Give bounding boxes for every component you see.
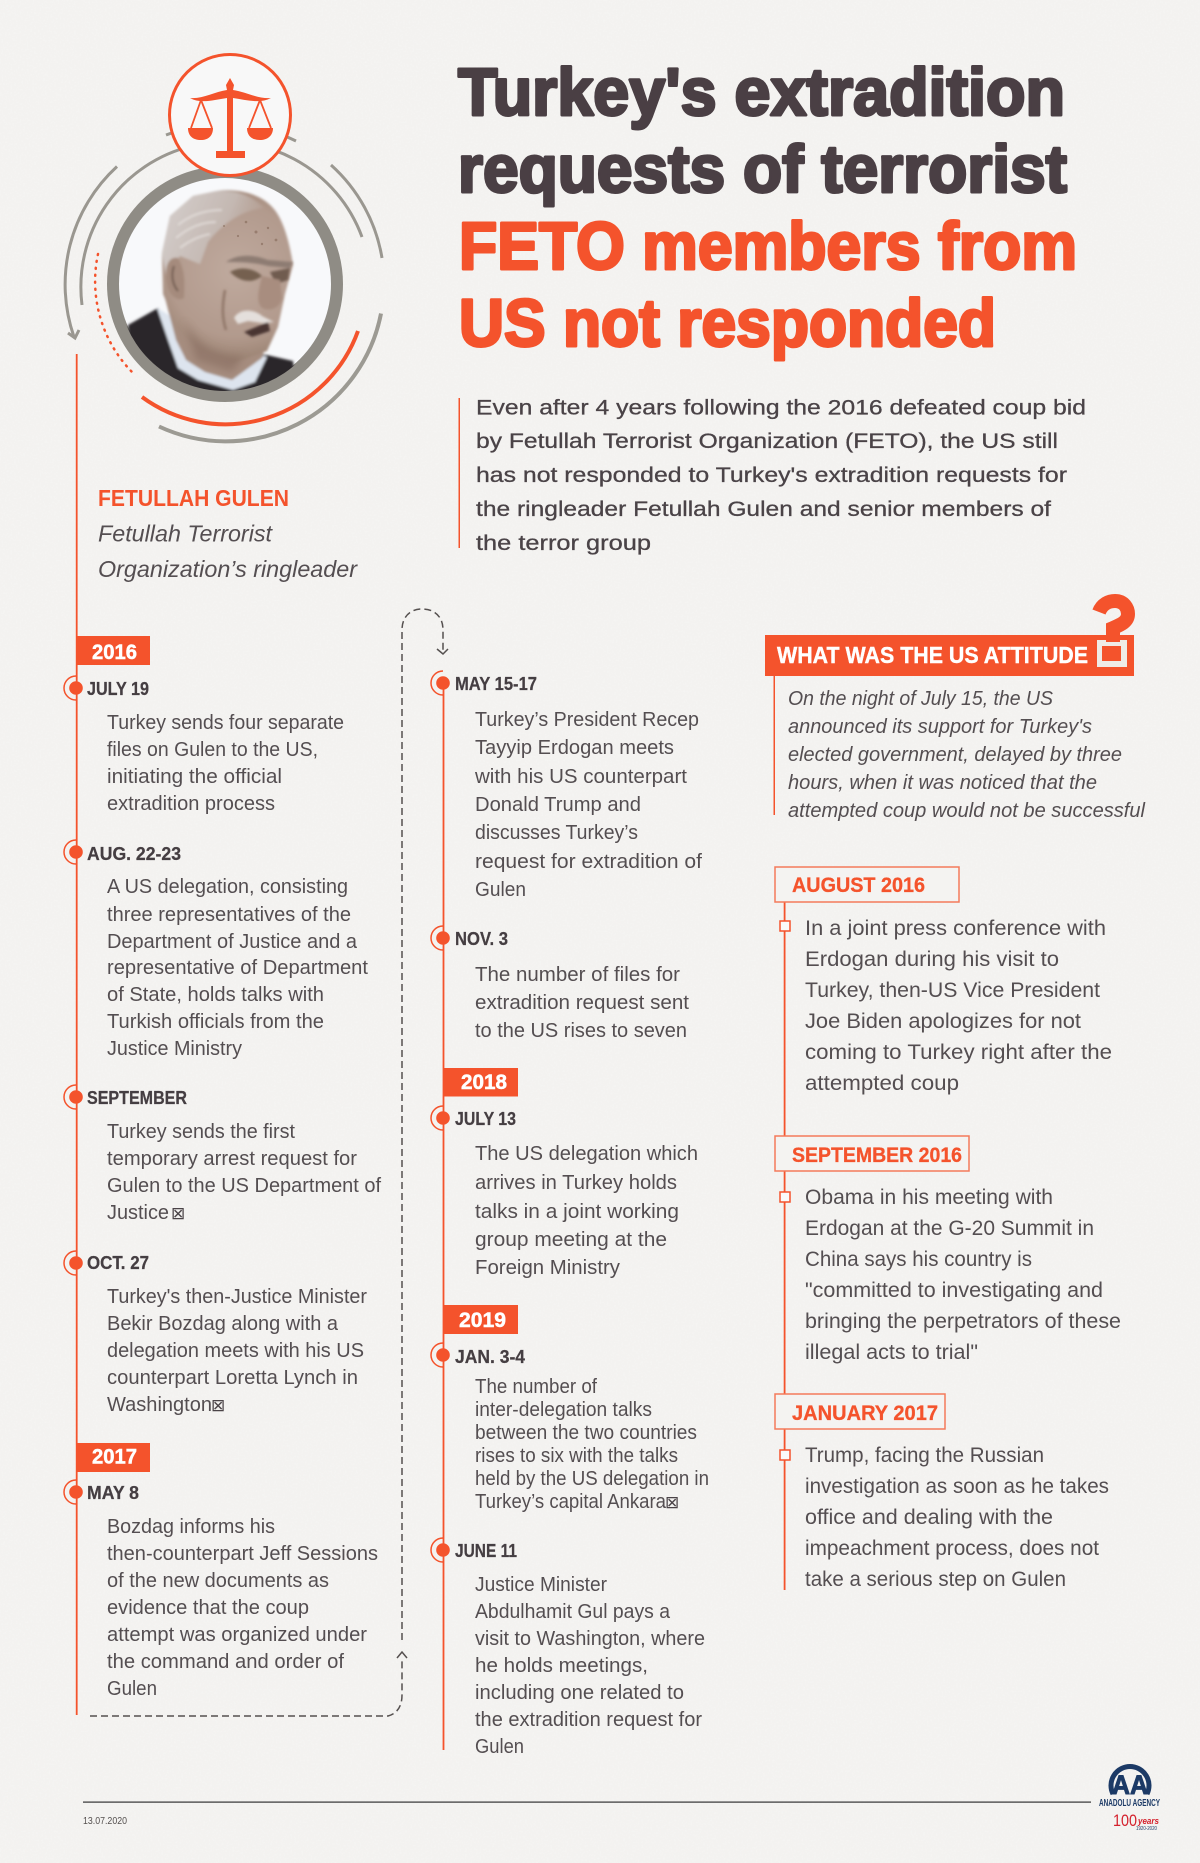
- event: June 11: Gulen: [475, 1736, 524, 1758]
- event: May 8: the command and order of: [107, 1651, 344, 1673]
- timeline column 2: [431, 671, 709, 1758]
- event: Oct. 27: OCT. 27: [87, 1253, 149, 1273]
- item: August 2016: In a joint press conference with: [805, 917, 1106, 940]
- year tag 2018: [443, 1068, 518, 1096]
- name caption: Fetullah Gulen: Organization’s ringleader: [98, 556, 358, 582]
- year tag 2016: 2016: [92, 641, 137, 664]
- event: Jan. 3-4: Turkey’s capital Ankara: [475, 1491, 667, 1513]
- event: July 19: initiating the official: [107, 766, 282, 788]
- item: August 2016: Turkey, then-US Vice President: [805, 979, 1100, 1002]
- logo: Anadolu Agency 100 years: years: [1137, 1816, 1159, 1826]
- intro text block: by Fetullah Terrorist Organization (FETO), the US still: [476, 429, 1058, 453]
- event: June 11: Abdulhamit Gul pays a: [475, 1601, 671, 1623]
- banner heading with question mark: [765, 601, 1134, 676]
- event: Aug. 22-23: Department of Justice and a: [107, 931, 358, 953]
- event: September: temporary arrest request for: [107, 1148, 357, 1170]
- event: Oct. 27: [64, 1251, 367, 1416]
- attitude summary text: attempted coup would not be successful: [788, 800, 1146, 822]
- attitude summary text: On the night of July 15, the US: [788, 688, 1054, 710]
- event: May 15-17: Donald Trump and: [475, 794, 641, 816]
- year tag 2016: [76, 636, 150, 665]
- item: August 2016: Erdogan during his visit to: [805, 948, 1059, 971]
- event: July 13: arrives in Turkey holds: [475, 1172, 677, 1194]
- event: May 8: attempt was organized under: [107, 1624, 367, 1646]
- item: January 2017: Trump, facing the Russian: [805, 1444, 1044, 1467]
- event: July 19: Turkey sends four separate: [107, 712, 344, 734]
- event: Oct. 27: ⊠: [211, 1396, 225, 1416]
- intro text block: the ringleader Fetullah Gulen and senior members of: [476, 497, 1051, 521]
- event: June 11: [431, 1538, 705, 1758]
- event: Aug. 22-23: Justice Ministry: [107, 1038, 242, 1060]
- event: Aug. 22-23: of State, holds talks with: [107, 984, 324, 1006]
- event: June 11: visit to Washington, where: [475, 1628, 705, 1650]
- event: Aug. 22-23: A US delegation, consisting: [107, 876, 348, 898]
- item: September 2016: Obama in his meeting with: [805, 1186, 1053, 1209]
- event: Jan. 3-4: JAN. 3-4: [455, 1347, 525, 1367]
- icon: scales of justice: [170, 54, 290, 176]
- event: Aug. 22-23: representative of Department: [107, 957, 368, 979]
- event: Nov. 3: NOV. 3: [455, 929, 508, 949]
- event: Nov. 3: extradition request sent: [475, 992, 689, 1014]
- name caption: Fetullah Gulen: [98, 485, 358, 582]
- event: July 19: files on Gulen to the US,: [107, 739, 318, 761]
- event: Oct. 27: Bekir Bozdag along with a: [107, 1313, 339, 1335]
- event: May 8: evidence that the coup: [107, 1597, 309, 1619]
- timeline column 1: [64, 354, 381, 1715]
- item: August 2016: coming to Turkey right after the: [805, 1041, 1112, 1064]
- event: Jan. 3-4: between the two countries: [475, 1422, 697, 1444]
- event: Aug. 22-23: three representatives of the: [107, 904, 351, 926]
- item: August 2016: [775, 867, 1112, 1095]
- attitude summary text: announced its support for Turkey's: [788, 716, 1092, 738]
- event: June 11: Justice Minister: [475, 1574, 607, 1596]
- logo: Anadolu Agency 100 years: 1920-2020: [1136, 1826, 1157, 1832]
- event: September: Gulen to the US Department of: [107, 1175, 381, 1197]
- event: May 15-17: Gulen: [475, 879, 526, 901]
- event: May 15-17: with his US counterpart: [474, 766, 687, 788]
- logo: Anadolu Agency 100 years: ANADOLU AGENCY: [1099, 1798, 1160, 1809]
- title: [458, 55, 1077, 361]
- event: July 13: The US delegation which: [475, 1143, 698, 1165]
- item: January 2017: JANUARY 2017: [792, 1402, 938, 1425]
- event: May 8: then-counterpart Jeff Sessions: [107, 1543, 378, 1565]
- panel: what was the US attitude: [765, 601, 1146, 822]
- event: May 15-17: discusses Turkey’s: [475, 822, 638, 844]
- item: September 2016: Erdogan at the G-20 Summit in: [805, 1217, 1094, 1240]
- event: May 15-17: MAY 15-17: [455, 674, 537, 694]
- item: September 2016: "committed to investigating and: [805, 1279, 1103, 1302]
- event: July 19: extradition process: [107, 793, 275, 815]
- item: January 2017: take a serious step on Gulen: [805, 1568, 1066, 1591]
- event: Nov. 3: to the US rises to seven: [475, 1020, 687, 1042]
- event: Aug. 22-23: Turkish officials from the: [107, 1011, 324, 1033]
- event: June 11: JUNE 11: [455, 1541, 517, 1561]
- event: May 8: Bozdag informs his: [107, 1516, 275, 1538]
- item: September 2016: illegal acts to trial": [805, 1341, 978, 1364]
- event: May 8: of the new documents as: [107, 1570, 329, 1592]
- event: July 13: Foreign Ministry: [475, 1257, 620, 1279]
- event: Oct. 27: Turkey's then-Justice Minister: [107, 1286, 367, 1308]
- event: Jan. 3-4: inter-delegation talks: [475, 1399, 652, 1421]
- name caption: Fetullah Gulen: Fetullah Terrorist: [98, 520, 274, 546]
- intro text block: has not responded to Turkey's extradition requests for: [476, 463, 1067, 487]
- year tag 2017: [76, 1443, 150, 1472]
- event: June 11: including one related to: [475, 1682, 684, 1704]
- event: July 13: talks in a joint working: [475, 1201, 679, 1223]
- event: September: Turkey sends the first: [107, 1121, 295, 1143]
- event: Oct. 27: delegation meets with his US: [107, 1340, 364, 1362]
- item: January 2017: [775, 1394, 1109, 1591]
- name caption: Fetullah Gulen: FETULLAH GULEN: [98, 485, 289, 511]
- logo: Anadolu Agency 100 years: AA: [1112, 1770, 1148, 1800]
- event: July 19: [64, 676, 344, 815]
- logo: Anadolu Agency 100 years: 100: [1113, 1811, 1137, 1830]
- intro text block: Even after 4 years following the 2016 defeated coup bid: [476, 396, 1086, 420]
- event: September: [64, 1085, 381, 1224]
- event: May 15-17: [431, 671, 702, 901]
- item: January 2017: investigation as soon as he takes: [805, 1475, 1109, 1498]
- title: FETO members from: [459, 209, 1077, 284]
- event: May 15-17: Turkey’s President Recep: [475, 709, 699, 731]
- item: September 2016: [775, 1136, 1121, 1364]
- event: Oct. 27: counterpart Loretta Lynch in: [107, 1367, 358, 1389]
- title: Turkey's extradition: [458, 55, 1065, 130]
- year tag 2017: 2017: [92, 1446, 137, 1468]
- event: Jan. 3-4: held by the US delegation in: [475, 1468, 709, 1490]
- item: August 2016: Joe Biden apologizes for not: [805, 1010, 1081, 1033]
- event: Nov. 3: [431, 926, 689, 1042]
- event: Jan. 3-4: rises to six with the talks: [475, 1445, 678, 1467]
- event: Aug. 22-23: AUG. 22-23: [87, 844, 181, 864]
- portrait photo of Fetullah Gulen: [113, 172, 337, 410]
- item: January 2017: impeachment process, does not: [805, 1537, 1099, 1560]
- footer rule and date: 13.07.2020: [83, 1816, 127, 1827]
- event: Aug. 22-23: [64, 840, 368, 1060]
- item: January 2017: office and dealing with the: [805, 1506, 1053, 1529]
- event: Jan. 3-4: [431, 1343, 709, 1513]
- banner heading with question mark: WHAT WAS THE US ATTITUDE: [777, 642, 1088, 668]
- item: September 2016: SEPTEMBER 2016: [792, 1144, 962, 1167]
- item: August 2016: attempted coup: [805, 1072, 959, 1095]
- event: July 13: JULY 13: [455, 1109, 516, 1129]
- event: Jan. 3-4: The number of: [475, 1376, 597, 1398]
- logo: Anadolu Agency 100 years: [1099, 1767, 1160, 1832]
- item: September 2016: bringing the perpetrators of these: [805, 1310, 1121, 1333]
- event: June 11: the extradition request for: [475, 1709, 702, 1731]
- event: Jan. 3-4: ⊠: [665, 1493, 679, 1513]
- attitude summary text: hours, when it was noticed that the: [788, 772, 1097, 794]
- event: May 15-17: request for extradition of: [475, 851, 702, 873]
- year tag 2019: [443, 1305, 518, 1334]
- event: May 8: [64, 1480, 378, 1700]
- event: June 11: he holds meetings,: [475, 1655, 648, 1677]
- event: Oct. 27: Washington: [107, 1394, 212, 1416]
- year tag 2019: 2019: [459, 1309, 506, 1332]
- portrait graphic with scale icon: [65, 54, 382, 441]
- title: US not responded: [459, 286, 996, 361]
- event: July 13: [431, 1106, 698, 1279]
- right timeline: [775, 867, 1121, 1591]
- event: September: ⊠: [171, 1204, 185, 1224]
- dashed connector arrow between columns: [90, 609, 448, 1716]
- year tag 2018: 2018: [461, 1071, 507, 1094]
- item: August 2016: AUGUST 2016: [792, 874, 925, 897]
- event: May 8: MAY 8: [87, 1483, 139, 1503]
- item: September 2016: China says his country is: [805, 1248, 1032, 1271]
- title: requests of terrorist: [458, 132, 1067, 207]
- event: July 13: group meeting at the: [475, 1229, 667, 1251]
- event: September: Justice: [107, 1202, 169, 1224]
- intro text block: [458, 396, 1086, 555]
- event: September: SEPTEMBER: [87, 1088, 187, 1108]
- event: May 8: Gulen: [107, 1678, 157, 1700]
- event: May 15-17: Tayyip Erdogan meets: [475, 737, 674, 759]
- attitude summary text: [774, 676, 1146, 822]
- event: Nov. 3: The number of files for: [475, 964, 680, 986]
- event: July 19: JULY 19: [87, 679, 149, 699]
- intro text block: the terror group: [476, 531, 651, 555]
- attitude summary text: elected government, delayed by three: [788, 744, 1122, 766]
